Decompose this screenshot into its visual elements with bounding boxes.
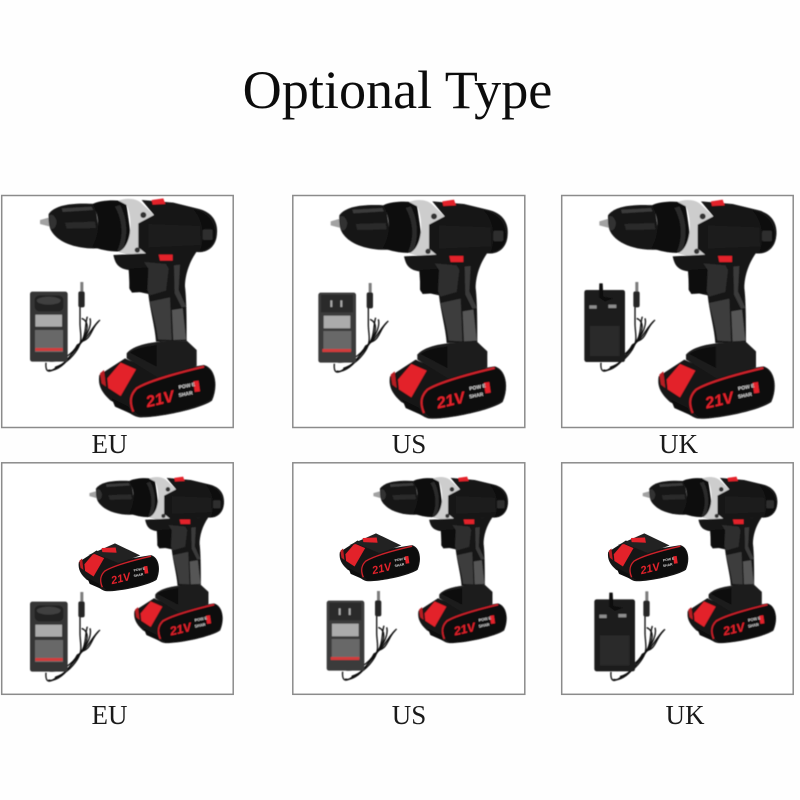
frame <box>293 196 525 428</box>
panel: UK two batteries <box>562 463 793 730</box>
drill with battery: 21V <box>434 389 468 413</box>
frame <box>293 463 525 694</box>
label EU: EU <box>92 700 128 730</box>
label US: US <box>392 429 426 459</box>
frame <box>2 196 233 428</box>
drill with battery: 21V <box>452 620 478 639</box>
panel: UK single battery <box>562 196 793 459</box>
drill with battery: POW E <box>478 616 492 623</box>
label UK: UK <box>659 429 698 459</box>
frame <box>562 463 793 694</box>
drill with battery: POW E <box>178 382 196 391</box>
title: Optional Type <box>243 60 552 120</box>
EU charger <box>30 282 100 371</box>
spare battery: 21V <box>370 561 394 577</box>
spare battery <box>608 533 688 581</box>
spare battery: SHAR <box>394 562 405 568</box>
drill with battery <box>643 477 777 643</box>
drill with battery: POW E <box>748 616 761 623</box>
US charger <box>327 591 397 680</box>
drill with battery <box>40 198 217 417</box>
UK charger <box>594 591 665 680</box>
label EU: EU <box>92 429 128 459</box>
frame <box>562 196 793 428</box>
spare battery <box>79 543 159 591</box>
drill with battery: SHAR <box>478 623 490 629</box>
spare battery <box>340 533 420 581</box>
panel: EU single battery <box>2 196 233 459</box>
spare battery: 21V <box>638 561 663 577</box>
drill with battery: POW E <box>194 616 208 623</box>
drill with battery: SHAR <box>469 392 484 400</box>
drill with battery <box>89 477 224 643</box>
spare battery: POW E <box>133 566 146 573</box>
drill with battery: SHAR <box>748 623 759 629</box>
drill with battery: 21V <box>143 388 177 411</box>
drill with battery: 21V <box>721 620 747 639</box>
EU charger <box>30 592 100 681</box>
drill with battery: 21V <box>703 389 737 413</box>
spare battery: SHAR <box>133 572 144 578</box>
drill with battery: POW E <box>738 383 756 392</box>
drill with battery: SHAR <box>194 623 206 629</box>
US charger <box>318 283 388 372</box>
drill with battery: POW E <box>469 383 487 392</box>
spare battery: POW E <box>394 556 407 563</box>
label UK: UK <box>666 700 705 730</box>
frame <box>2 463 233 694</box>
UK charger <box>584 282 655 371</box>
drill with battery <box>599 200 776 419</box>
drill with battery <box>373 477 508 643</box>
panel: EU two batteries <box>2 463 233 730</box>
panel: US two batteries <box>293 463 525 730</box>
drill with battery: SHAR <box>178 390 194 399</box>
drill with battery: 21V <box>168 620 194 639</box>
spare battery: POW E <box>663 556 675 563</box>
drill with battery <box>331 200 508 419</box>
panel: US single battery <box>293 196 525 459</box>
label US: US <box>392 700 426 730</box>
spare battery: SHAR <box>663 562 673 568</box>
drill with battery: SHAR <box>738 392 753 400</box>
spare battery: 21V <box>109 571 133 587</box>
